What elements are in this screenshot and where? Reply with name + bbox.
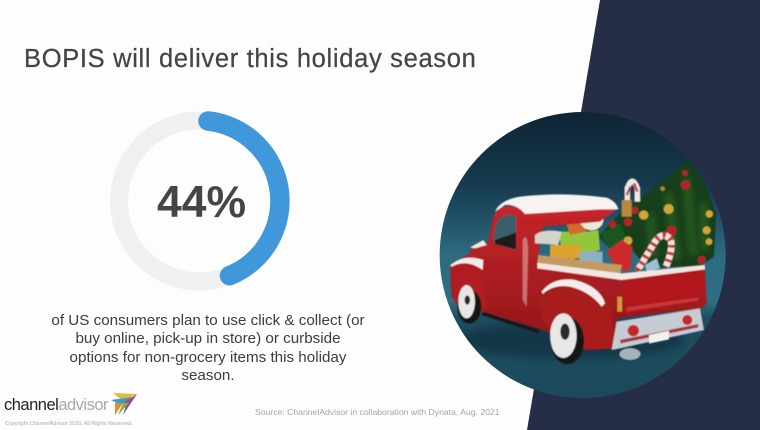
big candy cane: [637, 235, 671, 271]
description text: [51, 312, 365, 384]
copyright: Copyright ChannelAdvisor 2020. All Rights Reserved.: [5, 421, 133, 427]
front fender: [450, 258, 487, 312]
title: BOPIS will deliver this holiday season: [24, 45, 476, 73]
donut chart: 44%: [110, 111, 290, 290]
tailgate panel: [624, 276, 702, 314]
blue gift: [645, 258, 660, 272]
rear fender snow: [542, 279, 605, 307]
source note: Source: ChannelAdvisor in collaboration with Dynata, Aug. 2021: [255, 407, 500, 417]
ground shadow: [457, 322, 683, 358]
hood snow: [470, 240, 487, 248]
logo wordmark: channeladvisor: [4, 396, 108, 414]
logo: ChannelAdvisor: [4, 393, 137, 415]
description text: buy online, pick-up in store) or curbside: [75, 330, 341, 347]
roof snow: [495, 194, 618, 214]
description text: season.: [181, 367, 235, 384]
rear wheel: [550, 313, 584, 364]
exhaust smoke: [619, 348, 641, 360]
rear bumper: [612, 308, 704, 350]
cab window: [493, 215, 516, 250]
photo: red truck with Christmas tree: [440, 112, 726, 398]
rear fender: [541, 305, 614, 350]
tail lights: [628, 325, 639, 336]
description text: options for non-grocery items this holiday: [70, 349, 346, 366]
logo mark: [111, 393, 137, 415]
description text: of US consumers plan to use click & collect (or: [51, 312, 365, 329]
taillight strips: [617, 297, 622, 312]
bed snow rim: [537, 263, 705, 280]
license plate: [649, 331, 669, 344]
front fender snow: [450, 258, 483, 270]
truck body: [450, 206, 707, 350]
rear cab window: [535, 231, 562, 245]
cab door highlight: [523, 237, 528, 307]
front wheel: [457, 285, 481, 323]
small candy cane: [627, 181, 637, 202]
christmas tree: [598, 160, 716, 268]
gifts: [550, 200, 632, 272]
running board: [482, 312, 540, 333]
donut value: 44%: [157, 178, 246, 227]
wooden plank: [537, 255, 622, 273]
photo background circle: [440, 112, 726, 398]
